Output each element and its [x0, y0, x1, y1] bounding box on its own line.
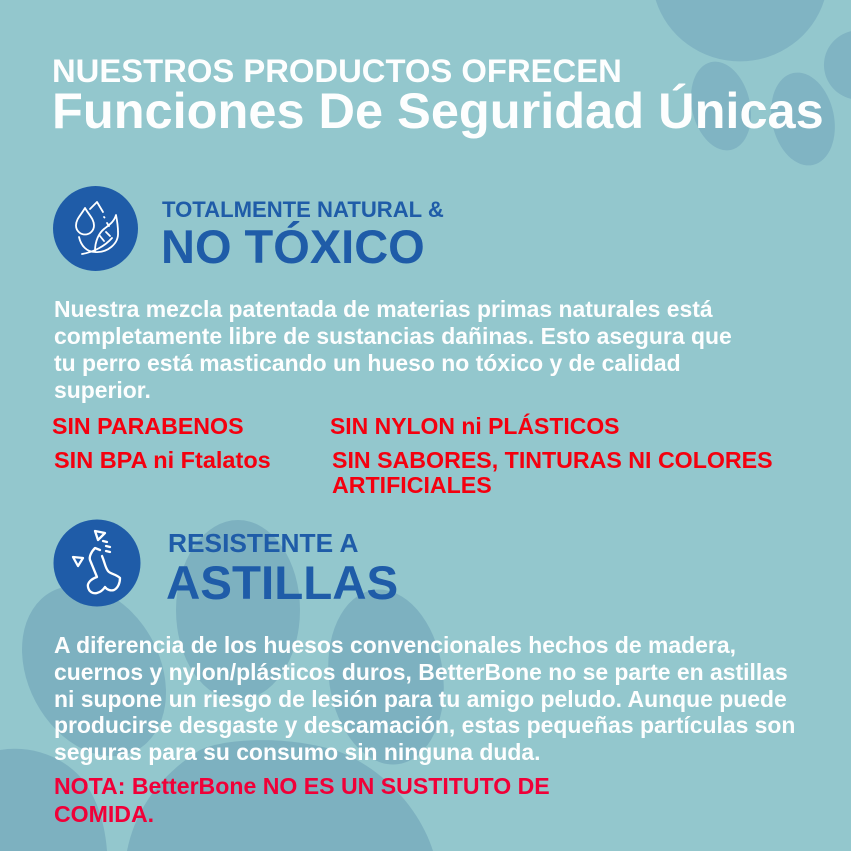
- text block: splinter description: producirse desgaste y descamación, estas pequeñas partículas son: [54, 712, 795, 738]
- heading: astillas: ASTILLAS: [166, 557, 398, 610]
- icon: water drop and leaf: [53, 186, 138, 271]
- text block: natural mix description: superior.: [54, 376, 151, 402]
- item: sin sabores: ARTIFICIALES: [332, 472, 492, 498]
- text block: natural mix description: [54, 296, 732, 403]
- heading: no toxico: TOTALMENTE NATURAL &: [162, 197, 444, 222]
- heading: no toxico: NO TÓXICO: [161, 220, 425, 273]
- item: sin nylon: SIN NYLON ni PLÁSTICOS: [330, 413, 619, 439]
- text block: splinter description: ni supone un riesgo de lesión para tu amigo peludo. Aunque puede: [54, 686, 787, 712]
- text block: splinter description: seguras para su consumo sin ninguna duda.: [54, 739, 541, 765]
- text block: natural mix description: completamente libre de sustancias dañinas. Esto asegura que: [54, 322, 732, 348]
- note: NOTA: BetterBone NO ES UN SUSTITUTO DE: [54, 773, 550, 799]
- heading: no toxico: [161, 197, 444, 273]
- title: [52, 52, 824, 139]
- text block: splinter description: cuernos y nylon/plásticos duros, BetterBone no se parte en astillas: [54, 659, 788, 685]
- title: NUESTROS PRODUCTOS OFRECEN: [52, 52, 622, 89]
- note: COMIDA.: [54, 801, 154, 827]
- text block: natural mix description: Nuestra mezcla patentada de materias primas naturales está: [54, 296, 713, 322]
- item: sin bpa: SIN BPA ni Ftalatos: [54, 447, 271, 473]
- icon: broken bone: [54, 520, 140, 606]
- list: free from: [52, 413, 773, 498]
- item: sin sabores: SIN SABORES, TINTURAS NI COLORES: [332, 447, 773, 473]
- text block: natural mix description: tu perro está masticando un hueso no tóxico y de calidad: [54, 350, 681, 376]
- text block: splinter description: [54, 632, 795, 765]
- heading: astillas: [166, 528, 398, 610]
- title: Funciones De Seguridad Únicas: [52, 82, 824, 139]
- note: [54, 773, 550, 827]
- item: sin sabores: [332, 447, 773, 498]
- text block: splinter description: A diferencia de los huesos convencionales hechos de madera,: [54, 632, 736, 658]
- heading: astillas: RESISTENTE A: [168, 528, 358, 558]
- item: sin parabenos: SIN PARABENOS: [52, 413, 244, 439]
